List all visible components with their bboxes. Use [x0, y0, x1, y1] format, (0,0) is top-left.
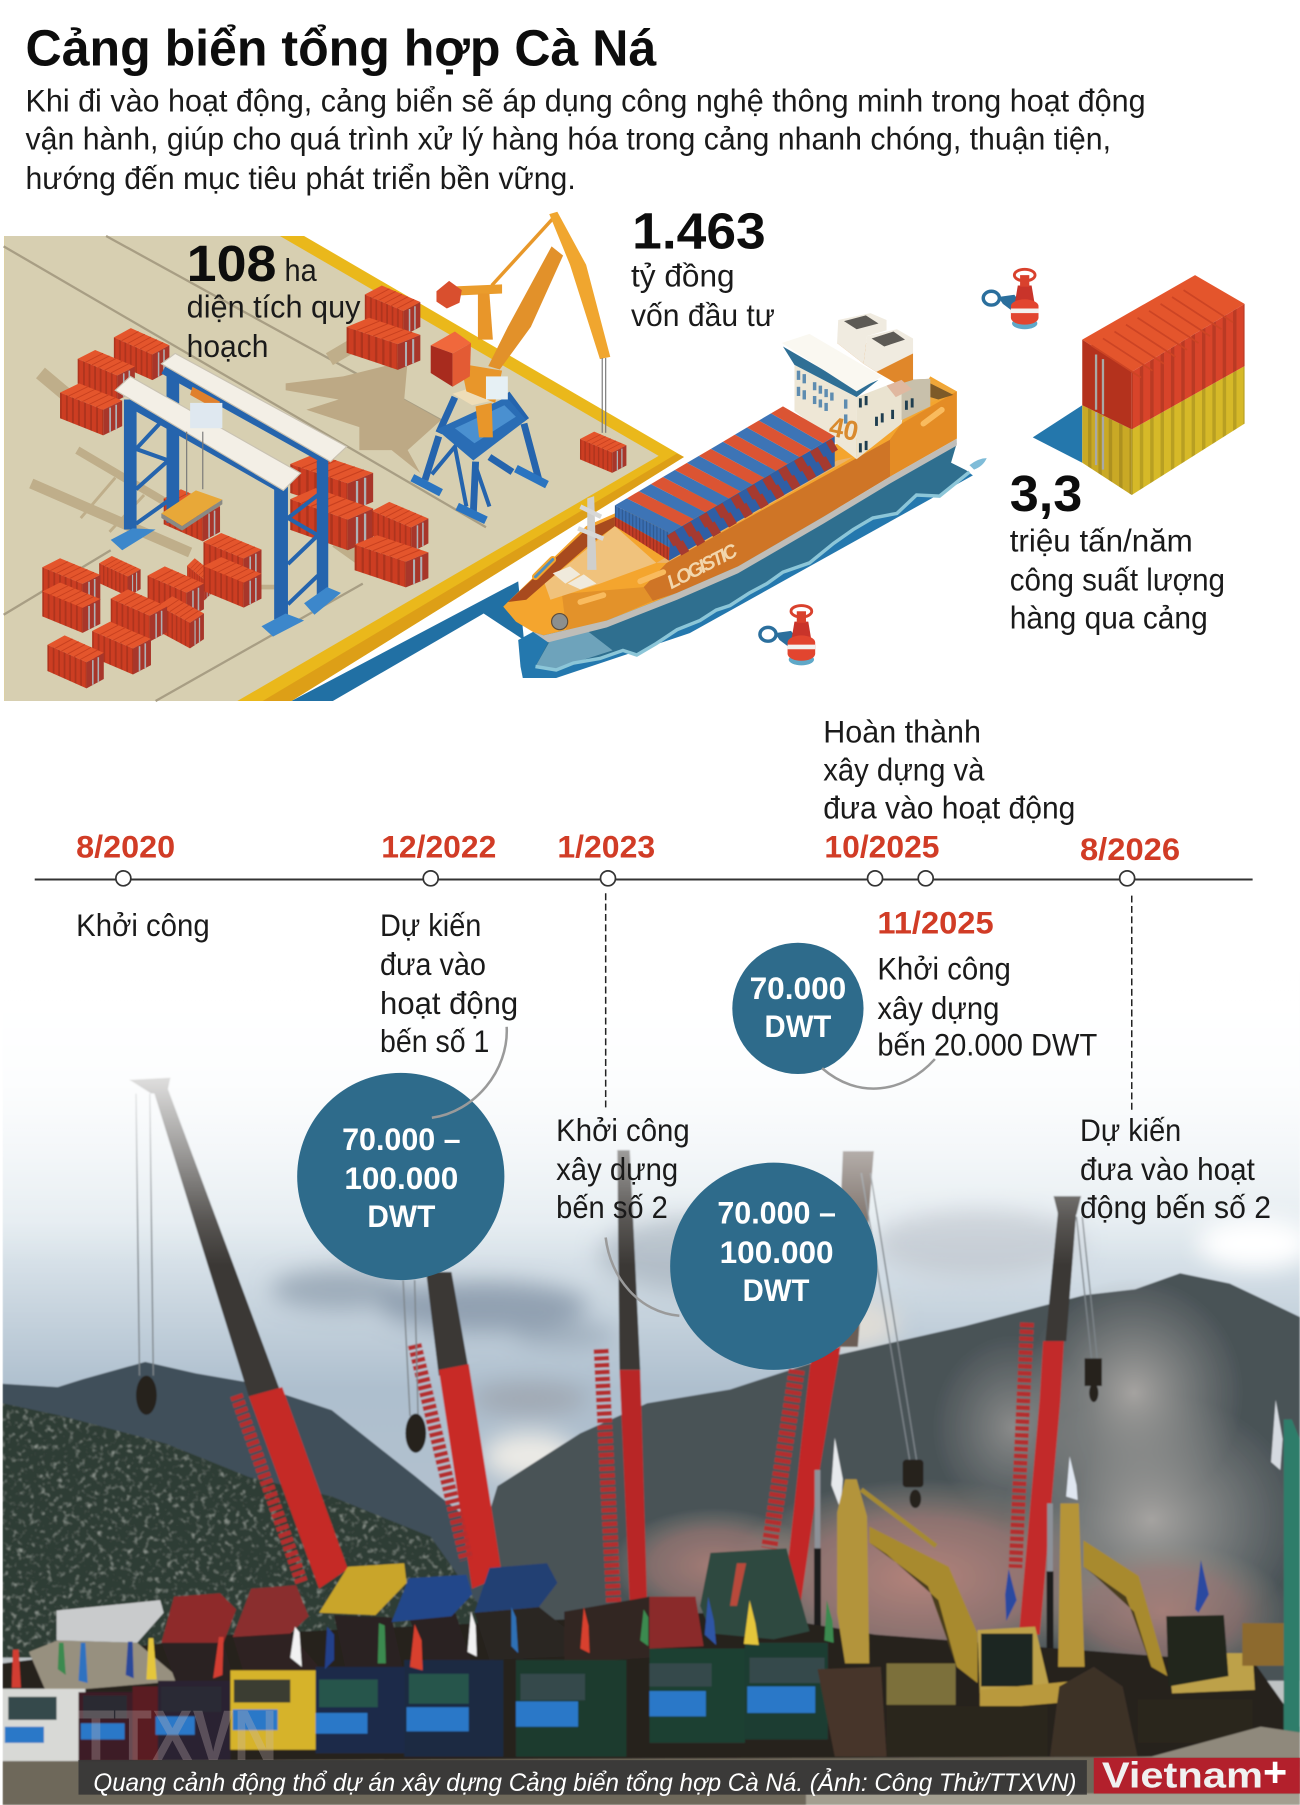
- milestone: bến số 2 start: Khởi công: [556, 1113, 690, 1148]
- milestone: Khởi công 8/2020: Khởi công: [76, 908, 210, 943]
- milestone: bến 20.000 DWT: bến 20.000 DWT: [877, 1028, 1097, 1063]
- stat: 3,3 triệu tấn/năm: 3,3: [1010, 465, 1082, 522]
- curved connectors: [432, 1027, 935, 1316]
- milestone: bến 20.000 DWT: xây dựng: [877, 991, 999, 1026]
- harbour jib crane: [412, 212, 610, 520]
- mountain texture: [2, 1399, 492, 1658]
- dust cloud: [610, 1278, 1300, 1681]
- stacked containers icon: [1033, 275, 1245, 495]
- intro paragraph: vận hành, giúp cho quá trình xử lý hàng hóa trong cảng nhanh chóng, thuận tiện,: [26, 122, 1111, 157]
- sky: [2, 973, 1300, 1805]
- water: [518, 463, 973, 678]
- bubble: 70.000 – 100.000 DWT (berth 1): 100.000: [344, 1161, 458, 1196]
- crates on deck: [553, 566, 580, 584]
- milestone: bến số 2 start: bến số 2: [556, 1190, 668, 1225]
- date labels: 12/2022: [381, 830, 496, 865]
- cranes: [129, 1077, 1102, 1657]
- milestone: bến số 2 operation: Dự kiến: [1080, 1113, 1181, 1148]
- timeline nodes: [116, 871, 1135, 886]
- construction site photo: [0, 967, 1300, 1805]
- timeline: [35, 714, 1271, 1370]
- bubble: 70.000 – 100.000 DWT (berth 1): DWT: [367, 1199, 435, 1234]
- land with yellow quay edge: [4, 236, 684, 701]
- date labels: 1/2023: [557, 830, 655, 865]
- TTXVN watermark: TTXVN: [77, 1696, 278, 1776]
- dark vehicle backdrop: [2, 1612, 1300, 1767]
- flags: [12, 1400, 1283, 1688]
- date labels: [76, 830, 1180, 941]
- date labels: 10/2025: [824, 830, 940, 865]
- stat: 108 ha: hoạch: [187, 329, 268, 364]
- fade to white at top of photo: [0, 967, 1300, 1266]
- bubble: 70.000 – 100.000 DWT (berth 1): [297, 1073, 504, 1280]
- ground: [2, 1727, 1300, 1805]
- milestone: bến số 2 operation: động bến số 2: [1080, 1190, 1271, 1225]
- bubble: 70.000 – 100.000 DWT (berth 2): DWT: [743, 1273, 809, 1308]
- milestone: bến số 1: [380, 908, 518, 1059]
- bubble: 70.000 – 100.000 DWT (berth 1): 70.000 –: [342, 1122, 461, 1157]
- milestone: bến số 1: bến số 1: [380, 1024, 489, 1059]
- stat: 3,3 triệu tấn/năm: hàng qua cảng: [1010, 601, 1208, 636]
- left white edge: [0, 967, 2, 1805]
- clouds: [271, 1209, 1300, 1479]
- milestone: bến 20.000 DWT: [877, 952, 1097, 1063]
- bubble: 70.000 – 100.000 DWT (berth 2): [670, 1163, 877, 1370]
- milestone: Hoàn thành: [823, 714, 1075, 825]
- stat: 3,3 triệu tấn/năm: [1010, 465, 1225, 636]
- caption bar: Quang cảnh động thổ dự án xây dựng Cảng biển tổng hợp Cà Ná. (Ảnh: Công Thử/TTXVN): [93, 1766, 1077, 1797]
- milestone: bến số 1: hoạt động: [380, 986, 518, 1021]
- milestone: bến 20.000 DWT: Khởi công: [877, 952, 1011, 987]
- milestone: Hoàn thành: đưa vào hoạt động: [823, 790, 1075, 825]
- tilted dump truck beds: [29, 1548, 809, 1692]
- stat: 108 ha: diện tích quy: [187, 290, 361, 325]
- red containers: [42, 285, 626, 688]
- stat: 3,3 triệu tấn/năm: công suất lượng: [1010, 563, 1225, 598]
- intro paragraph: hướng đến mục tiêu phát triển bền vững.: [26, 161, 576, 196]
- milestone: bến số 1: đưa vào: [380, 947, 486, 982]
- date labels: 11/2025: [877, 906, 994, 941]
- mountains: [2, 1273, 1300, 1681]
- milestone: bến số 2 start: xây dựng: [556, 1152, 678, 1187]
- intro paragraph: [26, 84, 1146, 196]
- logo: Vietnam+: Vietnam: [1102, 1756, 1263, 1796]
- stat: 108 ha: [187, 235, 361, 364]
- title: Cảng biển tổng hợp Cà Ná: [26, 20, 657, 77]
- milestone: bến số 2 operation: [1080, 1113, 1271, 1225]
- excavators: [817, 1419, 1300, 1757]
- icon: buoy top: [983, 269, 1039, 329]
- icon: buoy bottom: [760, 606, 815, 665]
- superstructure: 40: [827, 411, 861, 447]
- date labels: 8/2020: [76, 830, 175, 865]
- bubble: 70.000 DWT: DWT: [765, 1009, 831, 1044]
- logo: Vietnam+: [1094, 1749, 1300, 1796]
- water strip along quay: [291, 581, 524, 701]
- port illustration: [4, 203, 1245, 701]
- bow deck: [508, 517, 615, 602]
- stat: 3,3 triệu tấn/năm: triệu tấn/năm: [1010, 523, 1193, 558]
- orange hull: [503, 376, 957, 635]
- truck cabs: [2, 1643, 828, 1761]
- stat: 1.463 tỷ đồng: 1.463: [632, 203, 766, 260]
- bubble: 70.000 – 100.000 DWT (berth 2): 70.000 –: [717, 1196, 836, 1231]
- bubble: 70.000 DWT: 70.000: [750, 971, 846, 1006]
- lower hull: [535, 443, 969, 670]
- milestone: bến số 2 start: [556, 1113, 690, 1225]
- dashed connectors: [606, 893, 1132, 1111]
- milestone: bến số 2 operation: đưa vào hoạt: [1080, 1152, 1255, 1187]
- milestone: Hoàn thành: Hoàn thành: [823, 714, 981, 749]
- intro paragraph: Khi đi vào hoạt động, cảng biển sẽ áp dụng công nghệ thông minh trong hoạt động: [26, 84, 1146, 119]
- crane shadow on land: [31, 340, 441, 587]
- logo: Vietnam+: +: [1263, 1749, 1287, 1796]
- gantry crane: [111, 353, 347, 637]
- stat: 1.463 tỷ đồng: tỷ đồng: [631, 259, 735, 294]
- timeline axis: [35, 878, 1253, 880]
- stat: 1.463 tỷ đồng: [631, 203, 775, 333]
- milestone: bến số 1: Dự kiến: [380, 908, 481, 943]
- mast: [578, 496, 603, 570]
- date labels: 8/2026: [1080, 832, 1180, 867]
- ship containers: [615, 406, 835, 561]
- hydraulic pistons: [817, 1470, 1050, 1571]
- container ship: [503, 313, 987, 678]
- stat: 108 ha: ha: [285, 253, 317, 288]
- stat: 1.463 tỷ đồng: vốn đầu tư: [631, 298, 775, 333]
- superstructure: [782, 313, 930, 459]
- bubble: 70.000 DWT: [732, 943, 864, 1074]
- ship name: LOGISTIC: [664, 539, 742, 594]
- stat: 108 ha: 108: [187, 235, 276, 292]
- bubble: 70.000 – 100.000 DWT (berth 2): 100.000: [720, 1235, 834, 1270]
- milestone: Hoàn thành: xây dựng và: [823, 752, 985, 787]
